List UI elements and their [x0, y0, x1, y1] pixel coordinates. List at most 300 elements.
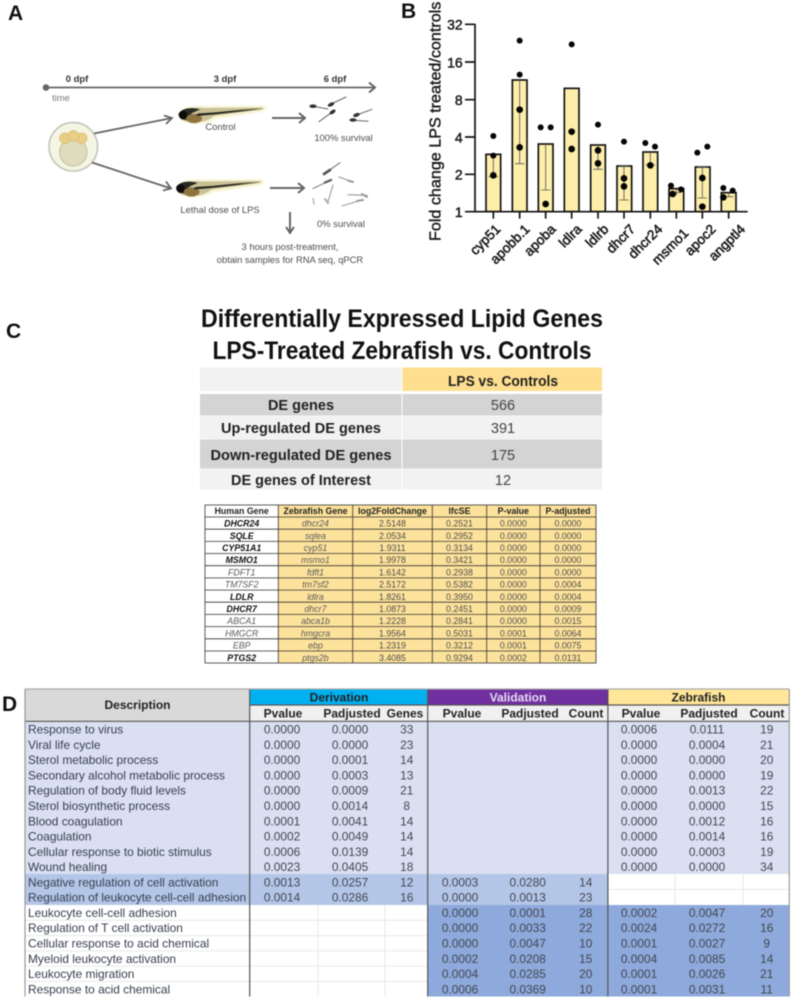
panel A: experimental timeline: [44, 73, 375, 265]
arrow: control to survival: [272, 113, 305, 123]
row: Cellular response to acid chemical: [28, 936, 770, 950]
row: Sterol metabolic process: [28, 753, 774, 767]
row TM7SF2: 0.5382: [446, 580, 473, 590]
arrow: embryo to LPS: [92, 162, 171, 190]
row: Regulation of leukocyte cell-cell adhesion: 0.0014: [264, 891, 301, 905]
row: Sterol biosynthetic process: 0.0000: [264, 799, 301, 813]
row: Sterol biosynthetic process: 15: [760, 799, 774, 813]
row FDFT1: 0.0000: [555, 568, 582, 578]
row: Blood coagulation: 16: [760, 814, 774, 828]
row: Negative regulation of cell activation: Negative regulation of cell activation: [28, 875, 218, 889]
x axis gene labels: [467, 221, 748, 268]
row: Leukocyte cell-cell adhesion: 0.0000: [442, 906, 479, 920]
row: Cellular response to acid chemical: 0.0000: [442, 936, 479, 950]
row PTGS2: 0.0002: [500, 653, 527, 663]
icon: dead larvae: [313, 163, 367, 206]
row: Cellular response to acid chemical: 0.0027: [689, 936, 726, 950]
y axis labels: 16: [447, 54, 463, 70]
row: Viral life cycle: 23: [400, 738, 414, 752]
row: Response to virus: 33: [400, 723, 414, 737]
row: Regulation of leukocyte cell-cell adhesion: 0.0286: [332, 891, 369, 905]
row ABCA1: 1.2228: [379, 616, 406, 626]
row: genes of interest: DE genes of Interest: [231, 473, 371, 489]
row: Leukocyte migration: 0.0001: [621, 967, 658, 981]
row: Sterol biosynthetic process: 0.0000: [689, 799, 726, 813]
row HMGCR: 0.0001: [500, 628, 527, 638]
row MSMO1: [226, 555, 582, 565]
row SQLE: SQLE: [230, 531, 255, 541]
column sub-headers: Count: [569, 706, 603, 720]
row: Sterol biosynthetic process: 0.0000: [621, 799, 658, 813]
row ABCA1: [226, 616, 582, 626]
summary table: [200, 368, 602, 490]
column sub-headers: Genes: [387, 706, 424, 720]
row MSMO1: 0.0000: [555, 555, 582, 565]
row PTGS2: 0.9294: [446, 653, 473, 663]
gene table header: Zebrafish Gene: [283, 506, 348, 516]
row: genes of interest: 12: [495, 473, 511, 489]
y axis title: Fold change LPS treated/controls: [427, 1, 444, 241]
row: Myeloid leukocyte activation: 0.0004: [621, 952, 658, 966]
x axis gene labels: dhcr24: [625, 221, 666, 262]
row: Response to virus: 0.0000: [264, 723, 301, 737]
row: Leukocyte migration: 20: [579, 967, 593, 981]
row: Blood coagulation: 0.0012: [689, 814, 726, 828]
row HMGCR: [225, 628, 582, 638]
row MSMO1: 1.9978: [379, 555, 406, 565]
row: Regulation of body fluid levels: 22: [760, 784, 774, 798]
row: Viral life cycle: 0.0000: [621, 738, 658, 752]
row SQLE: 0.0000: [555, 531, 582, 541]
row: Sterol metabolic process: 0.0000: [689, 753, 726, 767]
row: Viral life cycle: Viral life cycle: [28, 738, 101, 752]
panel label D: D: [2, 693, 17, 716]
row: Blood coagulation: 0.0000: [621, 814, 658, 828]
panel label B: B: [401, 0, 416, 23]
row: Response to acid chemical: 0.0369: [510, 982, 546, 996]
row: Sterol metabolic process: 0.0001: [332, 753, 369, 767]
row: Blood coagulation: 0.0041: [332, 814, 369, 828]
row: Regulation of body fluid levels: Regulation of body fluid levels: [28, 784, 186, 798]
x axis gene labels: ldlra: [556, 221, 585, 250]
row: Viral life cycle: 0.0000: [264, 738, 301, 752]
row: Negative regulation of cell activation: 0.0013: [264, 875, 301, 889]
row: Response to virus: 19: [760, 723, 774, 737]
panel C title: [201, 305, 603, 365]
gene table header: P-value: [498, 506, 529, 516]
row: Leukocyte cell-cell adhesion: Leukocyte cell-cell adhesion: [28, 906, 177, 920]
row: Regulation of T cell activation: [28, 921, 774, 935]
row: Sterol metabolic process: 0.0000: [621, 753, 658, 767]
row: Myeloid leukocyte activation: 0.0002: [442, 952, 479, 966]
icon: control zebrafish larva: [178, 106, 268, 124]
row: Wound healing: [28, 860, 774, 874]
row: Cellular response to biotic stimulus: [28, 845, 774, 859]
row: Cellular response to biotic stimulus: Cellular response to biotic stimulus: [28, 845, 212, 859]
row: Cellular response to biotic stimulus: 0.0139: [332, 845, 369, 859]
row DHCR7: 1.0873: [379, 604, 406, 614]
row PTGS2: ptgs2b: [301, 653, 329, 663]
row DHCR24: 0.2521: [446, 518, 473, 528]
row: Regulation of leukocyte cell-cell adhesion: 0.0013: [510, 891, 546, 905]
table header: [200, 368, 602, 391]
y axis labels: 4: [455, 129, 463, 145]
row LDLR: [230, 592, 582, 602]
row: Leukocyte migration: Leukocyte migration: [28, 967, 134, 981]
gene table header: Human Gene: [215, 506, 269, 516]
row DHCR7: 0.0009: [555, 604, 582, 614]
row LDLR: 0.0000: [500, 592, 527, 602]
row PTGS2: [227, 653, 582, 663]
row: Viral life cycle: 0.0004: [689, 738, 726, 752]
icon: surviving larvae: [310, 97, 372, 122]
row: Negative regulation of cell activation: [28, 875, 593, 889]
row: Secondary alcohol metabolic process: 0.0003: [332, 768, 369, 782]
y axis labels: 8: [455, 92, 463, 108]
row PTGS2: PTGS2: [227, 653, 256, 663]
row: Response to virus: 0.0006: [621, 723, 658, 737]
sampling note: [217, 241, 363, 265]
row DHCR24: DHCR24: [224, 518, 259, 528]
row TM7SF2: TM7SF2: [225, 580, 259, 590]
row: Cellular response to acid chemical: Cellular response to acid chemical: [28, 936, 209, 950]
row: Coagulation: 16: [760, 830, 774, 844]
label: control: Control: [205, 121, 236, 132]
row: Myeloid leukocyte activation: Myeloid leukocyte activation: [28, 952, 176, 966]
row: Leukocyte migration: 0.0285: [510, 967, 546, 981]
row LDLR: ldlra: [307, 592, 324, 602]
row ABCA1: abca1b: [301, 616, 330, 626]
row: Wound healing: 0.0000: [689, 860, 726, 874]
row: Regulation of body fluid levels: 0.0000: [621, 784, 658, 798]
row: up-regulated: Up-regulated DE genes: [221, 421, 381, 437]
row TM7SF2: [225, 580, 582, 590]
row: Regulation of body fluid levels: 21: [400, 784, 414, 798]
row: Sterol metabolic process: 14: [400, 753, 414, 767]
row FDFT1: 0.0000: [500, 568, 527, 578]
row: Coagulation: 0.0002: [264, 830, 301, 844]
timeline arrow: [44, 82, 375, 92]
row EBP: 0.0001: [500, 640, 527, 650]
label: 0% survival: 0% survival: [317, 218, 365, 229]
column sub-headers: Padjusted: [680, 706, 738, 720]
row: Regulation of T cell activation: 0.0033: [510, 921, 546, 935]
column sub-headers: Count: [750, 706, 784, 720]
label: lethal dose: Lethal dose of LPS: [180, 204, 260, 215]
row: Regulation of T cell activation: 16: [760, 921, 774, 935]
column sub-headers: [104, 698, 784, 720]
row ABCA1: 0.0015: [555, 616, 582, 626]
panel D: enrichment table: [25, 689, 789, 996]
row: Cellular response to acid chemical: 10: [579, 936, 593, 950]
x axis gene labels: apoba: [521, 221, 559, 259]
row: Coagulation: 14: [400, 830, 414, 844]
row DHCR24: dhcr24: [302, 518, 329, 528]
row: Negative regulation of cell activation: 0.0257: [332, 875, 369, 889]
row CYP51A1: cyp51: [304, 543, 327, 553]
column group headers: Zebrafish: [671, 690, 726, 704]
row: down-regulated: [200, 440, 602, 468]
row: Viral life cycle: 21: [760, 738, 774, 752]
row: Negative regulation of cell activation: 12: [400, 875, 414, 889]
panel B: bar chart of fold change: [427, 1, 748, 268]
row: Sterol metabolic process: 0.0000: [264, 753, 301, 767]
timeline labels: 3 dpf: [214, 73, 237, 84]
row: Cellular response to biotic stimulus: 14: [400, 845, 414, 859]
row: Leukocyte migration: 0.0004: [442, 967, 479, 981]
column sub-headers: Description: [104, 698, 171, 712]
arrow: embryo to control: [94, 116, 172, 134]
row: Blood coagulation: [28, 814, 774, 828]
gene table header: log2FoldChange: [358, 506, 427, 516]
row LDLR: 1.8261: [379, 592, 406, 602]
row: Secondary alcohol metabolic process: 19: [760, 768, 774, 782]
row: Blood coagulation: Blood coagulation: [28, 814, 123, 828]
row: Response to acid chemical: 0.0006: [442, 982, 479, 996]
row: Negative regulation of cell activation: 0.0280: [510, 875, 546, 889]
row: Blood coagulation: 14: [400, 814, 414, 828]
row DHCR7: dhcr7: [304, 604, 328, 614]
row TM7SF2: 2.5172: [379, 580, 406, 590]
row MSMO1: msmo1: [301, 555, 330, 565]
row: Regulation of T cell activation: 22: [579, 921, 593, 935]
row DHCR24: [224, 518, 582, 528]
y axis labels: 2: [455, 167, 463, 183]
row: Regulation of T cell activation: Regulation of T cell activation: [28, 921, 183, 935]
row FDFT1: 1.6142: [379, 568, 406, 578]
row TM7SF2: 0.0004: [555, 580, 582, 590]
row: Negative regulation of cell activation: 0.0003: [442, 875, 479, 889]
row: Regulation of leukocyte cell-cell adhesion: 23: [579, 891, 593, 905]
row DHCR7: 0.2451: [446, 604, 473, 614]
y axis labels: 1: [455, 204, 463, 220]
row LDLR: LDLR: [230, 592, 254, 602]
row: Wound healing: 0.0405: [332, 860, 369, 874]
x axis gene labels: dhcr7: [603, 222, 638, 256]
table shading: [25, 689, 789, 996]
row ABCA1: 0.0000: [500, 616, 527, 626]
row EBP: 0.0075: [555, 640, 582, 650]
row: Coagulation: Coagulation: [28, 830, 91, 844]
row: Sterol metabolic process: 20: [760, 753, 774, 767]
row: down-regulated: Down-regulated DE genes: [210, 448, 392, 464]
row: Regulation of leukocyte cell-cell adhesion: Regulation of leukocyte cell-cell adhesion: [28, 891, 246, 905]
column sub-headers: Pvalue: [264, 706, 303, 720]
row: Regulation of body fluid levels: 0.0009: [332, 784, 369, 798]
row ABCA1: ABCA1: [226, 616, 256, 626]
row TM7SF2: 0.0000: [500, 580, 527, 590]
row: Negative regulation of cell activation: 14: [579, 875, 593, 889]
panel label A: A: [8, 2, 23, 25]
timeline labels: [52, 73, 347, 103]
row: Coagulation: 0.0000: [621, 830, 658, 844]
row: Wound healing: 34: [760, 860, 774, 874]
row EBP: 0.3212: [446, 640, 473, 650]
row SQLE: [230, 531, 582, 541]
row DHCR24: 2.5148: [379, 518, 406, 528]
row MSMO1: MSMO1: [226, 555, 258, 565]
row: Wound healing: 0.0023: [264, 860, 301, 874]
column sub-headers: Padjusted: [323, 706, 381, 720]
row ABCA1: 0.2841: [446, 616, 473, 626]
row: Myeloid leukocyte activation: 14: [760, 952, 774, 966]
row: Regulation of T cell activation: 0.0000: [442, 921, 479, 935]
row: Sterol biosynthetic process: 0.0014: [332, 799, 369, 813]
row: Response to acid chemical: 0.0031: [689, 982, 726, 996]
y axis labels: [447, 17, 463, 220]
row: genes of interest: [200, 469, 602, 490]
row: Coagulation: 0.0014: [689, 830, 726, 844]
x axis gene labels: angptl4: [706, 221, 748, 264]
row CYP51A1: CYP51A1: [222, 543, 261, 553]
panel C title: Differentially Expressed Lipid Genes: [201, 305, 603, 333]
row CYP51A1: 0.0000: [555, 543, 582, 553]
table rules: [25, 689, 789, 996]
row: Myeloid leukocyte activation: 15: [579, 952, 593, 966]
row: Secondary alcohol metabolic process: [28, 768, 774, 782]
column sub-headers: Pvalue: [622, 706, 661, 720]
row: Secondary alcohol metabolic process: 0.0000: [689, 768, 726, 782]
row LDLR: 0.3950: [446, 592, 473, 602]
icon: zebrafish embryo: [49, 122, 98, 171]
row: Coagulation: 0.0049: [332, 830, 369, 844]
column sub-headers: Pvalue: [443, 706, 482, 720]
row: Regulation of leukocyte cell-cell adhesion: 0.0000: [442, 891, 479, 905]
row: Cellular response to acid chemical: 9: [763, 936, 770, 950]
row HMGCR: HMGCR: [225, 628, 259, 638]
row CYP51A1: [222, 543, 582, 553]
table header: LPS vs. Controls: [448, 374, 558, 390]
row: Cellular response to biotic stimulus: 0.0006: [264, 845, 301, 859]
row: up-regulated: [200, 416, 602, 439]
x axis gene labels: cyp51: [467, 222, 503, 258]
row: Myeloid leukocyte activation: 0.0085: [689, 952, 726, 966]
row FDFT1: fdft1: [307, 568, 324, 578]
row: Regulation of leukocyte cell-cell adhesion: 16: [400, 891, 414, 905]
row: Secondary alcohol metabolic process: 0.0000: [621, 768, 658, 782]
row: Secondary alcohol metabolic process: Secondary alcohol metabolic process: [28, 768, 225, 782]
row: down-regulated: 175: [491, 448, 515, 464]
bars: [486, 80, 736, 212]
row: Viral life cycle: [28, 738, 774, 752]
y axis labels: 32: [447, 17, 463, 33]
row TM7SF2: tm7sf2: [302, 580, 329, 590]
row CYP51A1: 0.3134: [446, 543, 473, 553]
row FDFT1: [228, 568, 582, 578]
timeline labels: time: [52, 92, 70, 103]
row HMGCR: 1.9564: [379, 628, 406, 638]
row: Myeloid leukocyte activation: [28, 952, 774, 966]
row DHCR7: DHCR7: [227, 604, 258, 614]
sampling note: 3 hours post-treatment,: [242, 241, 338, 252]
row EBP: [233, 640, 582, 650]
row: up-regulated: 391: [491, 421, 515, 437]
row: Blood coagulation: 0.0001: [264, 814, 301, 828]
row SQLE: 2.0534: [379, 531, 406, 541]
row PTGS2: 0.0131: [555, 653, 582, 663]
row MSMO1: 0.3421: [446, 555, 473, 565]
column group headers: Derivation: [310, 690, 368, 704]
row HMGCR: hmgcra: [301, 628, 330, 638]
gene table header: P-adjusted: [546, 506, 590, 516]
icon: LPS zebrafish larva: [176, 179, 266, 198]
arrow: to samples: [286, 212, 294, 233]
row EBP: ebp: [308, 640, 323, 650]
row FDFT1: 0.2938: [446, 568, 473, 578]
row: Cellular response to acid chemical: 0.0001: [621, 936, 658, 950]
row: Regulation of body fluid levels: 0.0013: [689, 784, 726, 798]
row: Response to acid chemical: 0.0001: [621, 982, 658, 996]
timeline labels: 0 dpf: [66, 73, 89, 84]
row: Coagulation: [28, 830, 774, 844]
row: Sterol biosynthetic process: 8: [403, 799, 410, 813]
row: Wound healing: 0.0000: [621, 860, 658, 874]
row: DE genes: DE genes: [268, 398, 334, 414]
row DHCR7: [227, 604, 582, 614]
x axis gene labels: apoc2: [682, 222, 719, 258]
row: DE genes: [200, 394, 602, 416]
row: Wound healing: 18: [400, 860, 414, 874]
row: Response to virus: 0.0000: [332, 723, 369, 737]
row HMGCR: 0.0064: [555, 628, 582, 638]
row: Cellular response to acid chemical: 0.0047: [510, 936, 546, 950]
row EBP: 1.2319: [379, 640, 406, 650]
row: Response to acid chemical: Response to acid chemical: [28, 982, 170, 996]
row MSMO1: 0.0000: [500, 555, 527, 565]
label: 100% survival: 100% survival: [314, 132, 373, 143]
row: Regulation of body fluid levels: [28, 784, 774, 798]
row: Leukocyte cell-cell adhesion: [28, 906, 774, 920]
sampling note: obtain samples for RNA seq, qPCR: [217, 254, 363, 265]
row: Viral life cycle: 0.0000: [332, 738, 369, 752]
column sub-headers: Padjusted: [501, 706, 559, 720]
row SQLE: sqlea: [305, 531, 326, 541]
gene table header: lfcSE: [448, 506, 471, 516]
row DHCR7: 0.0000: [500, 604, 527, 614]
row: Sterol metabolic process: Sterol metabolic process: [28, 753, 158, 767]
row: Response to virus: 0.0111: [690, 723, 725, 737]
row: Response to virus: Response to virus: [28, 723, 123, 737]
row EBP: EBP: [233, 640, 251, 650]
row: Leukocyte migration: 0.0026: [689, 967, 726, 981]
row CYP51A1: 1.9311: [379, 543, 406, 553]
error bars: [489, 80, 733, 200]
arrow: LPS to death: [270, 183, 304, 193]
row: Response to acid chemical: 11: [761, 982, 773, 996]
column group headers: Validation: [490, 690, 546, 704]
row: Secondary alcohol metabolic process: 0.0000: [264, 768, 301, 782]
row: Regulation of body fluid levels: 0.0000: [264, 784, 301, 798]
row HMGCR: 0.5031: [446, 628, 473, 638]
row FDFT1: FDFT1: [228, 568, 255, 578]
row: Leukocyte cell-cell adhesion: 0.0047: [689, 906, 726, 920]
panel C title: LPS-Treated Zebrafish vs. Controls: [212, 337, 592, 365]
x axis gene labels: apobb.1: [487, 222, 533, 267]
row: Leukocyte cell-cell adhesion: 20: [760, 906, 774, 920]
row: Wound healing: Wound healing: [28, 860, 107, 874]
x axis gene labels: msmo1: [649, 226, 691, 268]
row: Leukocyte cell-cell adhesion: 0.0002: [621, 906, 658, 920]
row: Leukocyte cell-cell adhesion: 0.0001: [510, 906, 546, 920]
column group headers: [250, 689, 789, 705]
row CYP51A1: 0.0000: [500, 543, 527, 553]
row: Leukocyte migration: 21: [760, 967, 774, 981]
gene table header: [215, 506, 590, 516]
row: Cellular response to biotic stimulus: 19: [760, 845, 774, 859]
row: Sterol biosynthetic process: Sterol biosynthetic process: [28, 799, 170, 813]
row: Response to acid chemical: 10: [579, 982, 593, 996]
row: Myeloid leukocyte activation: 0.0208: [510, 952, 546, 966]
